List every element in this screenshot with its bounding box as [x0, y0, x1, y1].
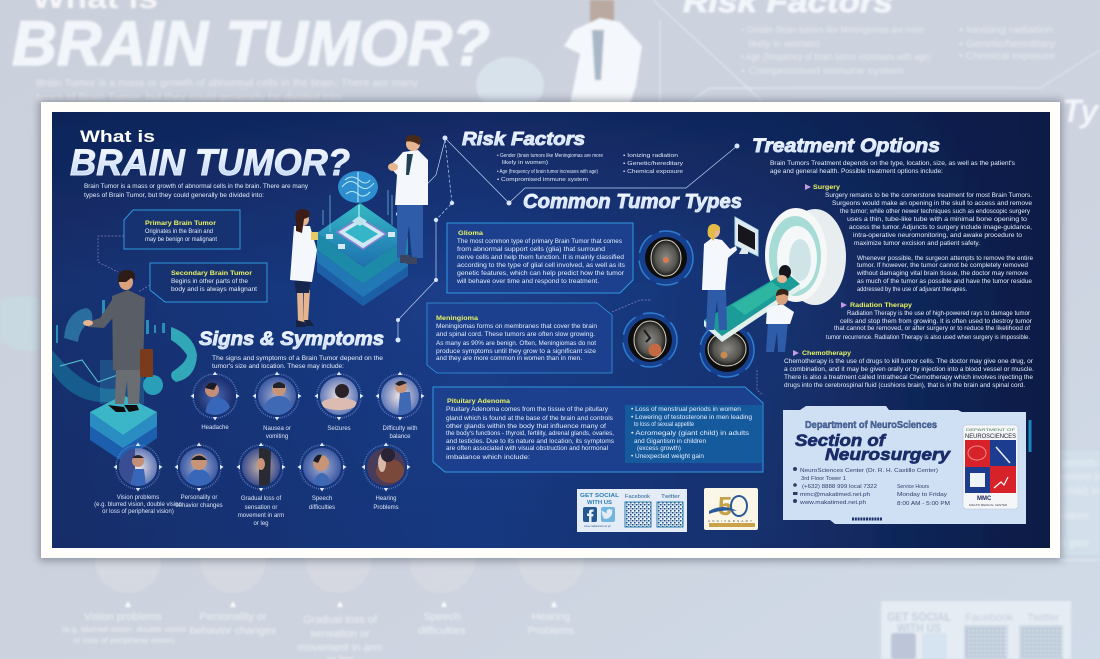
heading: risk factors: Risk Factors — [462, 129, 585, 149]
department card: Department of NeuroSciences — [805, 420, 937, 431]
intro text: Brain Tumor is a mass or growth of abnormal cells in the brain. There are many — [84, 184, 308, 190]
panel: glioma: will behave over time and respond to treatment. — [456, 279, 599, 285]
symptom labels: behavior changes — [175, 503, 223, 509]
background pituitary box — [860, 450, 1100, 560]
symptom labels: or loss of peripheral vision) — [102, 509, 174, 515]
treatment: chemotherapy: There is also a treatment called Intrathecal Chemotherapy which involves injecting the — [784, 375, 1034, 381]
50th anniversary badge — [704, 488, 758, 530]
treatment: surgery: Surgery remains to be the cornerstone treatment for most Brain Tumors. — [825, 193, 1032, 199]
department logo: MAKATI MEDICAL CENTER — [969, 503, 1008, 507]
panel: pituitary adenoma: and testicles. Due to its nature and location, its symptoms — [446, 439, 614, 445]
symptom labels: balance — [389, 434, 411, 440]
background risk factors: • Age (frequency of brain tumor increases with age) — [741, 51, 931, 63]
panel: meningioma: and spinal cord. These tumors are often slow growing. — [436, 332, 595, 338]
symptom: seizures — [314, 372, 364, 420]
symptom labels: Nausea or — [263, 426, 291, 432]
panel: glioma: genetic features, which can help predict how the tumor — [457, 271, 624, 277]
risk factors list — [497, 153, 683, 183]
pituitary symptom list: to loss of sexual appetite — [634, 422, 695, 428]
title: BRAIN TUMOR? — [70, 142, 350, 183]
treatment: chemotherapy: drugs into the cerebrospinal fluid (cushions brain), that is in the brain and spinal cord. — [784, 383, 1025, 389]
symptom: hearing — [362, 442, 410, 492]
panel: meningioma: and they are more common in women than in men. — [436, 356, 582, 362]
department card: (+632) 8888 999 local 7322 — [802, 484, 877, 490]
pituitary symptom list: and Gigantism in children — [634, 439, 706, 445]
intro text — [84, 184, 308, 199]
symptom labels: difficulties — [309, 505, 335, 511]
background symptom labels: (e.g. blurred vision, double vision — [62, 624, 186, 634]
intro text: types of Brain Tumor, but they could generally be divided into: — [84, 193, 264, 199]
background symptom labels: Problems — [528, 625, 575, 637]
panel: meningioma — [427, 303, 612, 373]
background symptom labels: Speech — [423, 611, 461, 623]
symptom labels: (e.g. blurred vision, double vision — [94, 502, 182, 508]
symptom: nausea — [252, 372, 302, 420]
department card: Neurosurgery — [825, 445, 952, 464]
panel: glioma — [447, 223, 633, 293]
background risk factors: • Gender (brain tumors like Meningiomas are more — [741, 24, 924, 36]
background symptom labels: behavior changes — [190, 625, 277, 637]
background social box: Twitter — [1027, 612, 1060, 624]
treatment: surgery: addressed by the use of adjuvant therapies. — [857, 287, 967, 293]
connector dots — [396, 136, 740, 342]
background symptom labels: difficulties — [418, 625, 467, 637]
background intro text — [36, 77, 419, 103]
50th anniversary badge: ANNIVERSARY — [708, 519, 752, 523]
panel: glioma: nerve cells and help them function. It is mainly classified — [457, 255, 624, 261]
secondary brain tumor box: Begins in other parts of the — [171, 279, 249, 285]
treatment intro: age and general health. Possible treatment options include: — [770, 169, 943, 175]
panel: meningioma: As many as 90% are benign. Often, Meningiomas do not — [436, 341, 596, 347]
background risk factors: • Ionizing radiation — [959, 24, 1053, 36]
treatment: surgery: Whenever possible, the surgeon attempts to remove the entire — [857, 256, 1034, 262]
social media box: GET SOCIAL — [580, 493, 620, 499]
symptom labels: Gradual loss of — [241, 496, 282, 502]
panel: glioma: Glioma — [458, 230, 483, 237]
risk factors list: • Gender (brain tumors like Meningiomas are more — [497, 153, 603, 159]
department logo: DEPARTMENT OF — [966, 428, 1016, 432]
pituitary symptom list: • Acromegaly (giant child) in adults — [631, 431, 749, 437]
symptom labels: Speech — [312, 496, 332, 502]
symptom labels: vomiting — [266, 434, 288, 440]
symptom labels: Problems — [373, 505, 399, 511]
department card: mmc@makatimed.net.ph — [800, 492, 870, 498]
treatment: surgery: uses a thin, tube-like tube with a minimal bone opening to — [847, 217, 1028, 223]
treatment: surgery: the tumor; while other newer techniques such as endoscopic surgery — [840, 209, 1030, 215]
pituitary symptom list — [625, 405, 762, 463]
background pituitary box: and Gigantism in children — [970, 510, 1089, 522]
treatment: chemotherapy: Chemotherapy — [802, 350, 851, 357]
pituitary symptom list: • Loss of menstrual periods in women — [631, 407, 741, 413]
symptom: sensation — [236, 442, 286, 492]
pituitary symptom list: • Unexpected weight gain — [631, 454, 704, 460]
heading: signs and symptoms: Signs & Symptoms — [199, 329, 384, 350]
pituitary symptom list: • Lowering of testosterone in men leading — [631, 415, 752, 421]
background pituitary box: • Unexpected weight gain — [970, 537, 1089, 549]
illustration: mri machine with doctors — [702, 208, 846, 352]
panel: meningioma: Meningioma — [436, 315, 478, 322]
male doctor — [766, 322, 788, 352]
treatment: radiation therapy: Radiation Therapy is the use of high-powered rays to damage tumor — [847, 311, 1030, 317]
department logo — [963, 425, 1018, 509]
social media box — [577, 489, 687, 532]
treatment: surgery: without damaging vital brain tissue, the doctor may remove — [856, 271, 1029, 277]
panel: meningioma: produce symptoms until they grow to a significant size — [436, 349, 597, 355]
secondary brain tumor box: Secondary Brain Tumor — [171, 270, 252, 277]
risk factors list: likely in women) — [502, 160, 548, 166]
primary brain tumor box — [124, 210, 240, 249]
panel: glioma: The most common type of primary Brain Tumor that comes — [457, 239, 622, 245]
background symptom labels: or loss of peripheral vision) — [73, 635, 175, 645]
main poster panel — [52, 112, 1050, 548]
symptom labels: Vision problems — [117, 495, 159, 501]
treatment intro — [770, 161, 1015, 175]
heading: common tumor types: Common Tumor Types — [523, 191, 742, 213]
risk factors list: • Compromised immune system — [497, 177, 589, 183]
background symptom labels: Hearing — [532, 611, 570, 623]
department card: 3rd Floor Tower 1 — [801, 476, 846, 482]
table — [704, 272, 800, 336]
background lines — [653, 0, 1100, 102]
background arrows — [125, 601, 557, 607]
background symptom labels — [62, 611, 575, 659]
50th anniversary badge: 5 — [718, 491, 732, 521]
background title: BRAIN TUMOR? — [12, 9, 490, 79]
treatment: radiation therapy — [826, 302, 1032, 341]
treatment: chemotherapy: Chemotherapy is the use of drugs to kill tumor cells. The doctor may give one drug, or — [784, 359, 1033, 365]
treatment: chemotherapy — [784, 350, 1034, 389]
illustration: female doctor — [290, 209, 318, 327]
connector lines — [98, 138, 763, 395]
treatment: surgery: tumor. If however, the tumor cannot be completely removed — [857, 263, 1028, 269]
treatment: surgery — [805, 184, 1034, 293]
symptom labels: Hearing — [375, 496, 397, 502]
symptom: personality — [174, 442, 224, 492]
background intro text: types of Brain Tumor, but they could generally be divided into: — [36, 91, 344, 103]
panel: meningioma: Meningiomas forms on membranes that cover the brain — [436, 324, 597, 330]
department card: Section of — [795, 431, 888, 450]
machine — [784, 209, 846, 305]
background brain — [476, 57, 544, 113]
signs intro: tumor's size and location. These may include: — [212, 364, 344, 370]
background social box: GET SOCIAL — [887, 610, 951, 624]
treatment: radiation therapy: tumor recurrence. Radiation Therapy is also used when surgery is impossible. — [826, 335, 1030, 341]
icon: twitter — [601, 507, 615, 522]
background symptom labels: movement in arm — [298, 642, 382, 654]
contact icons — [793, 467, 798, 503]
mri: pituitary scan — [700, 323, 754, 377]
social media box: Facebook — [625, 494, 650, 500]
panel: glioma: according to the type of glial cell involved, as well as its — [457, 263, 625, 269]
pituitary symptom list: (excess growth) — [637, 446, 681, 452]
background social box: WITH US — [897, 621, 941, 635]
panel: pituitary adenoma: the body's functions - thyroid, fertility, adrenal glands, ovaries, — [446, 431, 614, 437]
background social box: Facebook — [965, 612, 1014, 624]
female doctor — [706, 285, 727, 330]
background risk factors: likely in women) — [748, 38, 820, 50]
primary brain tumor box: Primary Brain Tumor — [145, 220, 216, 227]
symptom labels — [94, 425, 417, 527]
symptom: vision — [114, 442, 162, 492]
panel: pituitary adenoma: are often associated with visual obstruction and hormonal — [446, 446, 608, 452]
icon: brain — [338, 171, 378, 203]
primary brain tumor box: may be benign or malignant — [145, 237, 217, 243]
symptom labels: or leg — [253, 521, 269, 527]
illustration: brain on isometric platform — [317, 171, 408, 306]
background doctor — [564, 0, 642, 104]
person — [115, 368, 141, 404]
treatment: surgery: maximize tumor excision and patient safety. — [854, 241, 980, 247]
social media box: www.makatimed.net.ph — [584, 524, 611, 528]
background symptom labels: Gradual loss of — [303, 614, 378, 626]
background risk factors: • Compromised immune system — [741, 65, 904, 77]
primary brain tumor box: Originates in the Brain and — [145, 229, 213, 235]
department card: Service Hours — [897, 484, 929, 490]
panel: pituitary adenoma: gland which is found at the base of the brain and controls — [446, 416, 613, 422]
background treatment title fragment: Ty — [1062, 93, 1100, 129]
department card — [783, 406, 1030, 524]
department card: 8:00 AM - 5:00 PM — [897, 501, 950, 507]
mri: meningioma scan — [623, 313, 677, 367]
background symptom labels: Vision problems — [84, 611, 163, 623]
qr code: twitter — [657, 502, 683, 527]
background social box — [881, 601, 1071, 659]
risk factors list: • Genetic/hereditary — [623, 161, 683, 167]
panel: pituitary adenoma — [433, 387, 763, 472]
department logo: MMC — [977, 496, 992, 502]
panel shadow — [39, 100, 1062, 561]
background intro text: Brain Tumor is a mass or growth of abnormal cells in the brain. There are many — [36, 77, 419, 89]
monitor — [735, 217, 758, 256]
signs intro: The signs and symptoms of a Brain Tumor depend on the — [212, 356, 384, 362]
treatment: surgery: access the tumor. Adjuncts to surgery include image-guidance, — [849, 225, 1032, 231]
heading: treatment options: Treatment Options — [752, 136, 940, 157]
signs intro — [212, 356, 384, 370]
platform — [90, 418, 157, 462]
background teal arc — [0, 296, 42, 351]
treatment: radiation therapy: that cannot be removed, or after surgery or to reduce the likelihood of — [834, 326, 1030, 332]
treatment intro: Brain Tumors Treatment depends on the type, location, size, as well as the patient's — [770, 161, 1015, 167]
symptom labels: Headache — [201, 425, 229, 431]
secondary brain tumor box: body and is always malignant — [171, 287, 257, 293]
decorative bars — [56, 300, 165, 343]
treatment: surgery: Surgery — [813, 184, 840, 191]
risk factors list: • Ionizing radiation — [623, 153, 678, 159]
icon: facebook — [583, 507, 597, 523]
panel: glioma: from abnormal support cells (glia) that surround — [457, 247, 605, 253]
background risk factors: • Genetic/hereditary — [959, 38, 1056, 50]
symptom labels: Seizures — [327, 426, 351, 432]
white frame — [41, 102, 1060, 558]
mri: glioma scan — [639, 231, 693, 285]
treatment: surgery: as much of the tumor as possible and have the tumor residue — [857, 279, 1033, 285]
title: What is — [80, 127, 155, 146]
department card: NeuroSciences Center (Dr. R. H. Castillo Center) — [800, 468, 938, 474]
symptom: headache — [190, 372, 240, 420]
background symptom circles — [95, 527, 584, 593]
social media box: WITH US — [587, 500, 612, 506]
panel: pituitary adenoma: other glands within the body that influence many of — [446, 424, 606, 430]
treatment: chemotherapy: a combination, and it may be given orally or by injection into a blood vessel or muscle. — [784, 367, 1034, 373]
symptom: balance — [376, 372, 424, 420]
treatment: radiation therapy: Radiation Therapy — [850, 302, 912, 309]
secondary brain tumor box — [150, 263, 267, 302]
panel: pituitary adenoma: Pituitary Adenoma comes from the tissue of the pituitary — [446, 407, 608, 413]
panel: pituitary adenoma: Pituitary Adenoma — [447, 398, 510, 405]
background symptom labels: sensation or — [310, 628, 370, 640]
department card: Monday to Friday — [897, 492, 947, 498]
risk factors list: • Chemical exposure — [623, 169, 683, 175]
background symptom labels: Personality or — [199, 611, 267, 623]
qr code: facebook — [625, 502, 651, 527]
symptom labels: sensation or — [245, 505, 277, 511]
background risk factors: • Chemical exposure — [959, 50, 1055, 62]
patient — [732, 282, 782, 315]
symptom labels: Personality or — [181, 495, 217, 501]
treatment: surgery: Surgeons would make an opening in the skull to access and remove — [832, 201, 1033, 207]
symptom: speech — [298, 442, 346, 492]
symptom labels: movement in arm — [238, 513, 284, 519]
symptom labels: Difficulty with — [383, 426, 417, 432]
treatment: radiation therapy: cells and stop them from growing. It is often used to destroy tumor — [840, 319, 1032, 325]
illustration: male doctor — [388, 135, 428, 264]
social media box: Twitter — [661, 494, 680, 500]
department card: www.makatimed.net.ph — [799, 500, 866, 506]
panel: pituitary adenoma: imbalance which include: — [446, 455, 530, 461]
illustration: man with briefcase on platform — [52, 270, 197, 462]
treatment: surgery: intra-operative neuromonitoring, and awake procedure to — [853, 233, 1023, 239]
department logo: NEUROSCIENCES — [965, 434, 1016, 440]
risk factors list: • Age (frequency of brain tumor increases with age) — [497, 169, 598, 175]
background risk factors — [683, 0, 1056, 77]
